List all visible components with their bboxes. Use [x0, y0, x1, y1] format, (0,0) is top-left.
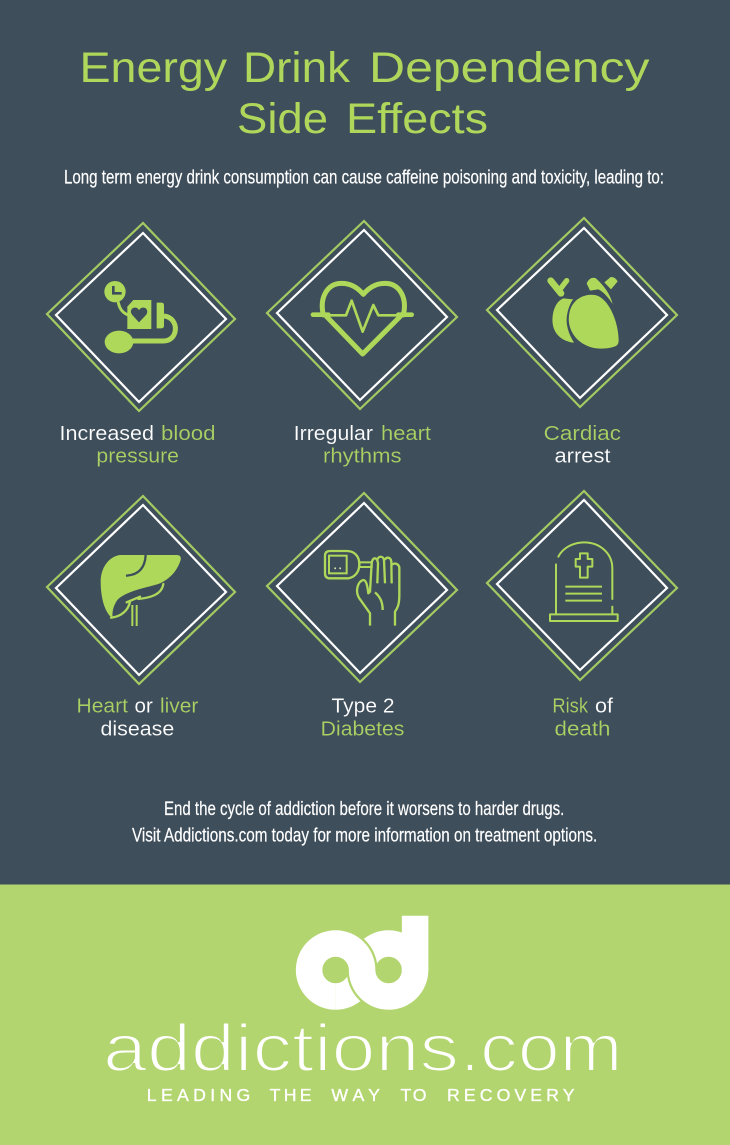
label: Cardiac [544, 423, 621, 445]
tagline: LEADING [147, 1085, 250, 1105]
icon: blood pressure cuff [104, 281, 175, 353]
diamond frame [267, 221, 457, 409]
label: Type 2 [332, 696, 394, 718]
label: rhythms [323, 446, 402, 468]
tagline: THE [270, 1085, 312, 1105]
icon: liver [101, 555, 181, 626]
footer panel [0, 884, 730, 1145]
title: Effects [346, 95, 488, 143]
closing text: Visit Addictions.com today for more information on treatment options. [132, 825, 597, 847]
title: Side [237, 95, 328, 143]
label [552, 696, 613, 740]
icon: anatomical heart [551, 277, 619, 349]
tagline: RECOVERY [447, 1085, 575, 1105]
label: heart [381, 423, 431, 445]
panel: increased blood pressure [47, 223, 235, 468]
title: Energy [80, 44, 228, 92]
logo wordmark: . [461, 1011, 479, 1086]
diamond frame [487, 491, 677, 680]
title [80, 44, 650, 143]
label [294, 423, 431, 468]
logo wordmark: com [480, 1011, 622, 1086]
closing text: End the cycle of addiction before it worsens to harder drugs. [164, 798, 564, 820]
tagline: TO [400, 1085, 426, 1105]
label: blood [161, 423, 216, 445]
label: Diabetes [321, 718, 404, 740]
diamond frame [47, 496, 235, 684]
label [76, 696, 199, 740]
label [544, 423, 621, 468]
label: Risk [552, 696, 589, 718]
title: Dependency [369, 44, 650, 92]
icon: heart with pulse [313, 283, 412, 354]
label: Increased [60, 423, 154, 445]
panel: cardiac arrest [487, 218, 677, 468]
label: Irregular [294, 423, 373, 445]
logo wordmark: addictions [103, 1011, 459, 1086]
panel: heart or liver disease [47, 496, 235, 740]
label: liver [160, 696, 199, 718]
label: disease [100, 718, 174, 740]
label: arrest [554, 446, 611, 468]
title: Drink [243, 44, 351, 92]
icon: glucose meter and hand [325, 551, 399, 626]
diamond frame [487, 218, 677, 407]
label: of [595, 696, 613, 718]
logo mark [309, 916, 415, 997]
label [60, 423, 216, 468]
diamond frame [47, 223, 235, 411]
label: Heart [76, 696, 128, 718]
tagline [147, 1085, 575, 1105]
panel: type 2 diabetes [267, 493, 457, 740]
icon: gravestone [550, 542, 618, 621]
background panel [0, 0, 730, 885]
diamond frame [267, 493, 457, 682]
label: death [554, 718, 610, 740]
closing text [132, 798, 597, 847]
tagline: WAY [331, 1085, 380, 1105]
panel: irregular heart rhythms [267, 221, 457, 468]
label: pressure [96, 446, 179, 468]
label: or [134, 696, 153, 718]
logo wordmark [103, 1011, 622, 1086]
label [321, 696, 404, 740]
panel: risk of death [487, 491, 677, 740]
